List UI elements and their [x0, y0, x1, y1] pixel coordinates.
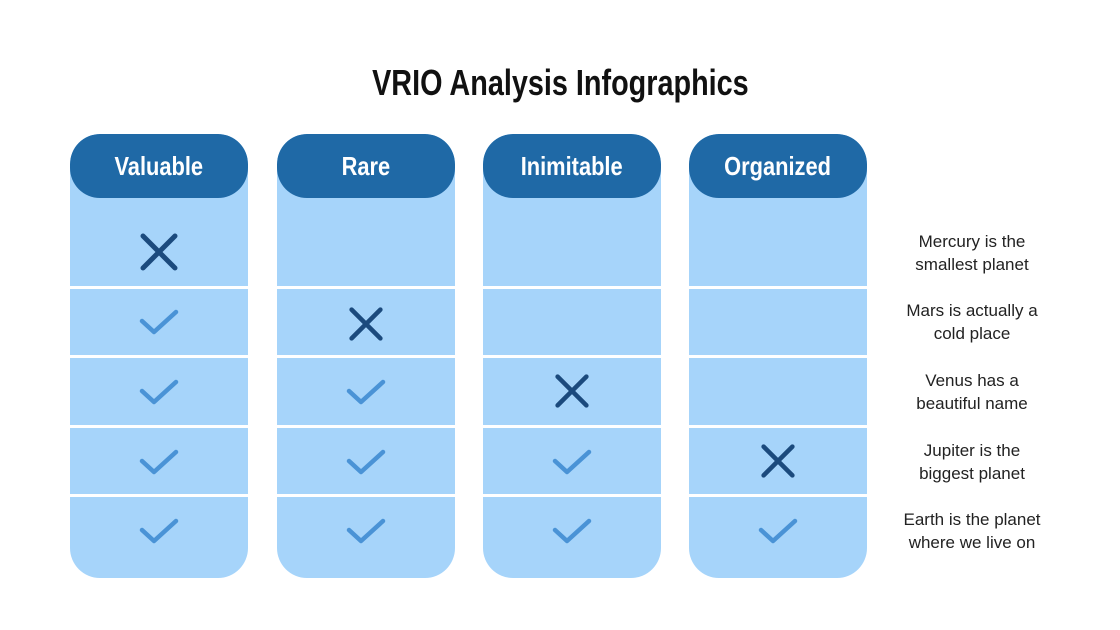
- header: Valuable: [70, 134, 248, 198]
- column: Rare: [277, 134, 455, 578]
- icon: check: [140, 380, 178, 404]
- text: Jupiter: biggest planet: [919, 464, 1025, 483]
- text: Venus: [916, 371, 1028, 413]
- header: Inimitable: Inimitable: [521, 151, 623, 181]
- text: Earth: where we live on: [909, 533, 1035, 552]
- text: Jupiter: Jupiter is the: [924, 441, 1020, 460]
- text: Mercury: [915, 232, 1029, 274]
- icon: check: [346, 518, 386, 544]
- icon: check: [758, 518, 798, 544]
- icon: check: [552, 450, 592, 474]
- text: Mars: [906, 301, 1038, 343]
- text: Venus: beautiful name: [916, 394, 1028, 413]
- title: VRIO Analysis Infographics: [372, 62, 748, 103]
- icon: cross: [761, 444, 795, 478]
- text: Mars: cold place: [934, 324, 1010, 343]
- text: Mars: Mars is actually a: [906, 301, 1038, 320]
- column: Valuable: [70, 134, 248, 578]
- text: Venus: Venus has a: [925, 371, 1019, 390]
- text: Jupiter: [919, 441, 1025, 483]
- text: Mercury: smallest planet: [915, 255, 1029, 274]
- icon: check: [140, 450, 178, 474]
- icon: check: [346, 450, 386, 474]
- column: Organized: [689, 134, 867, 578]
- text: Earth: [903, 510, 1041, 552]
- icon: check: [346, 380, 386, 404]
- icon: cross: [555, 374, 589, 408]
- column: Inimitable: [483, 134, 661, 578]
- header: Rare: Rare: [342, 151, 390, 181]
- header: Rare: [277, 134, 455, 198]
- icon: cross: [349, 307, 383, 341]
- icon: check: [552, 518, 592, 544]
- icon: check: [140, 518, 178, 544]
- header: Organized: Organized: [725, 151, 831, 181]
- text: Earth: Earth is the planet: [903, 510, 1041, 529]
- header: Inimitable: [483, 134, 661, 198]
- icon: check: [140, 310, 178, 334]
- icon: cross: [140, 234, 178, 270]
- header: Organized: [689, 134, 867, 198]
- header: Valuable: Valuable: [115, 151, 203, 181]
- text: Mercury: Mercury is the: [919, 232, 1025, 251]
